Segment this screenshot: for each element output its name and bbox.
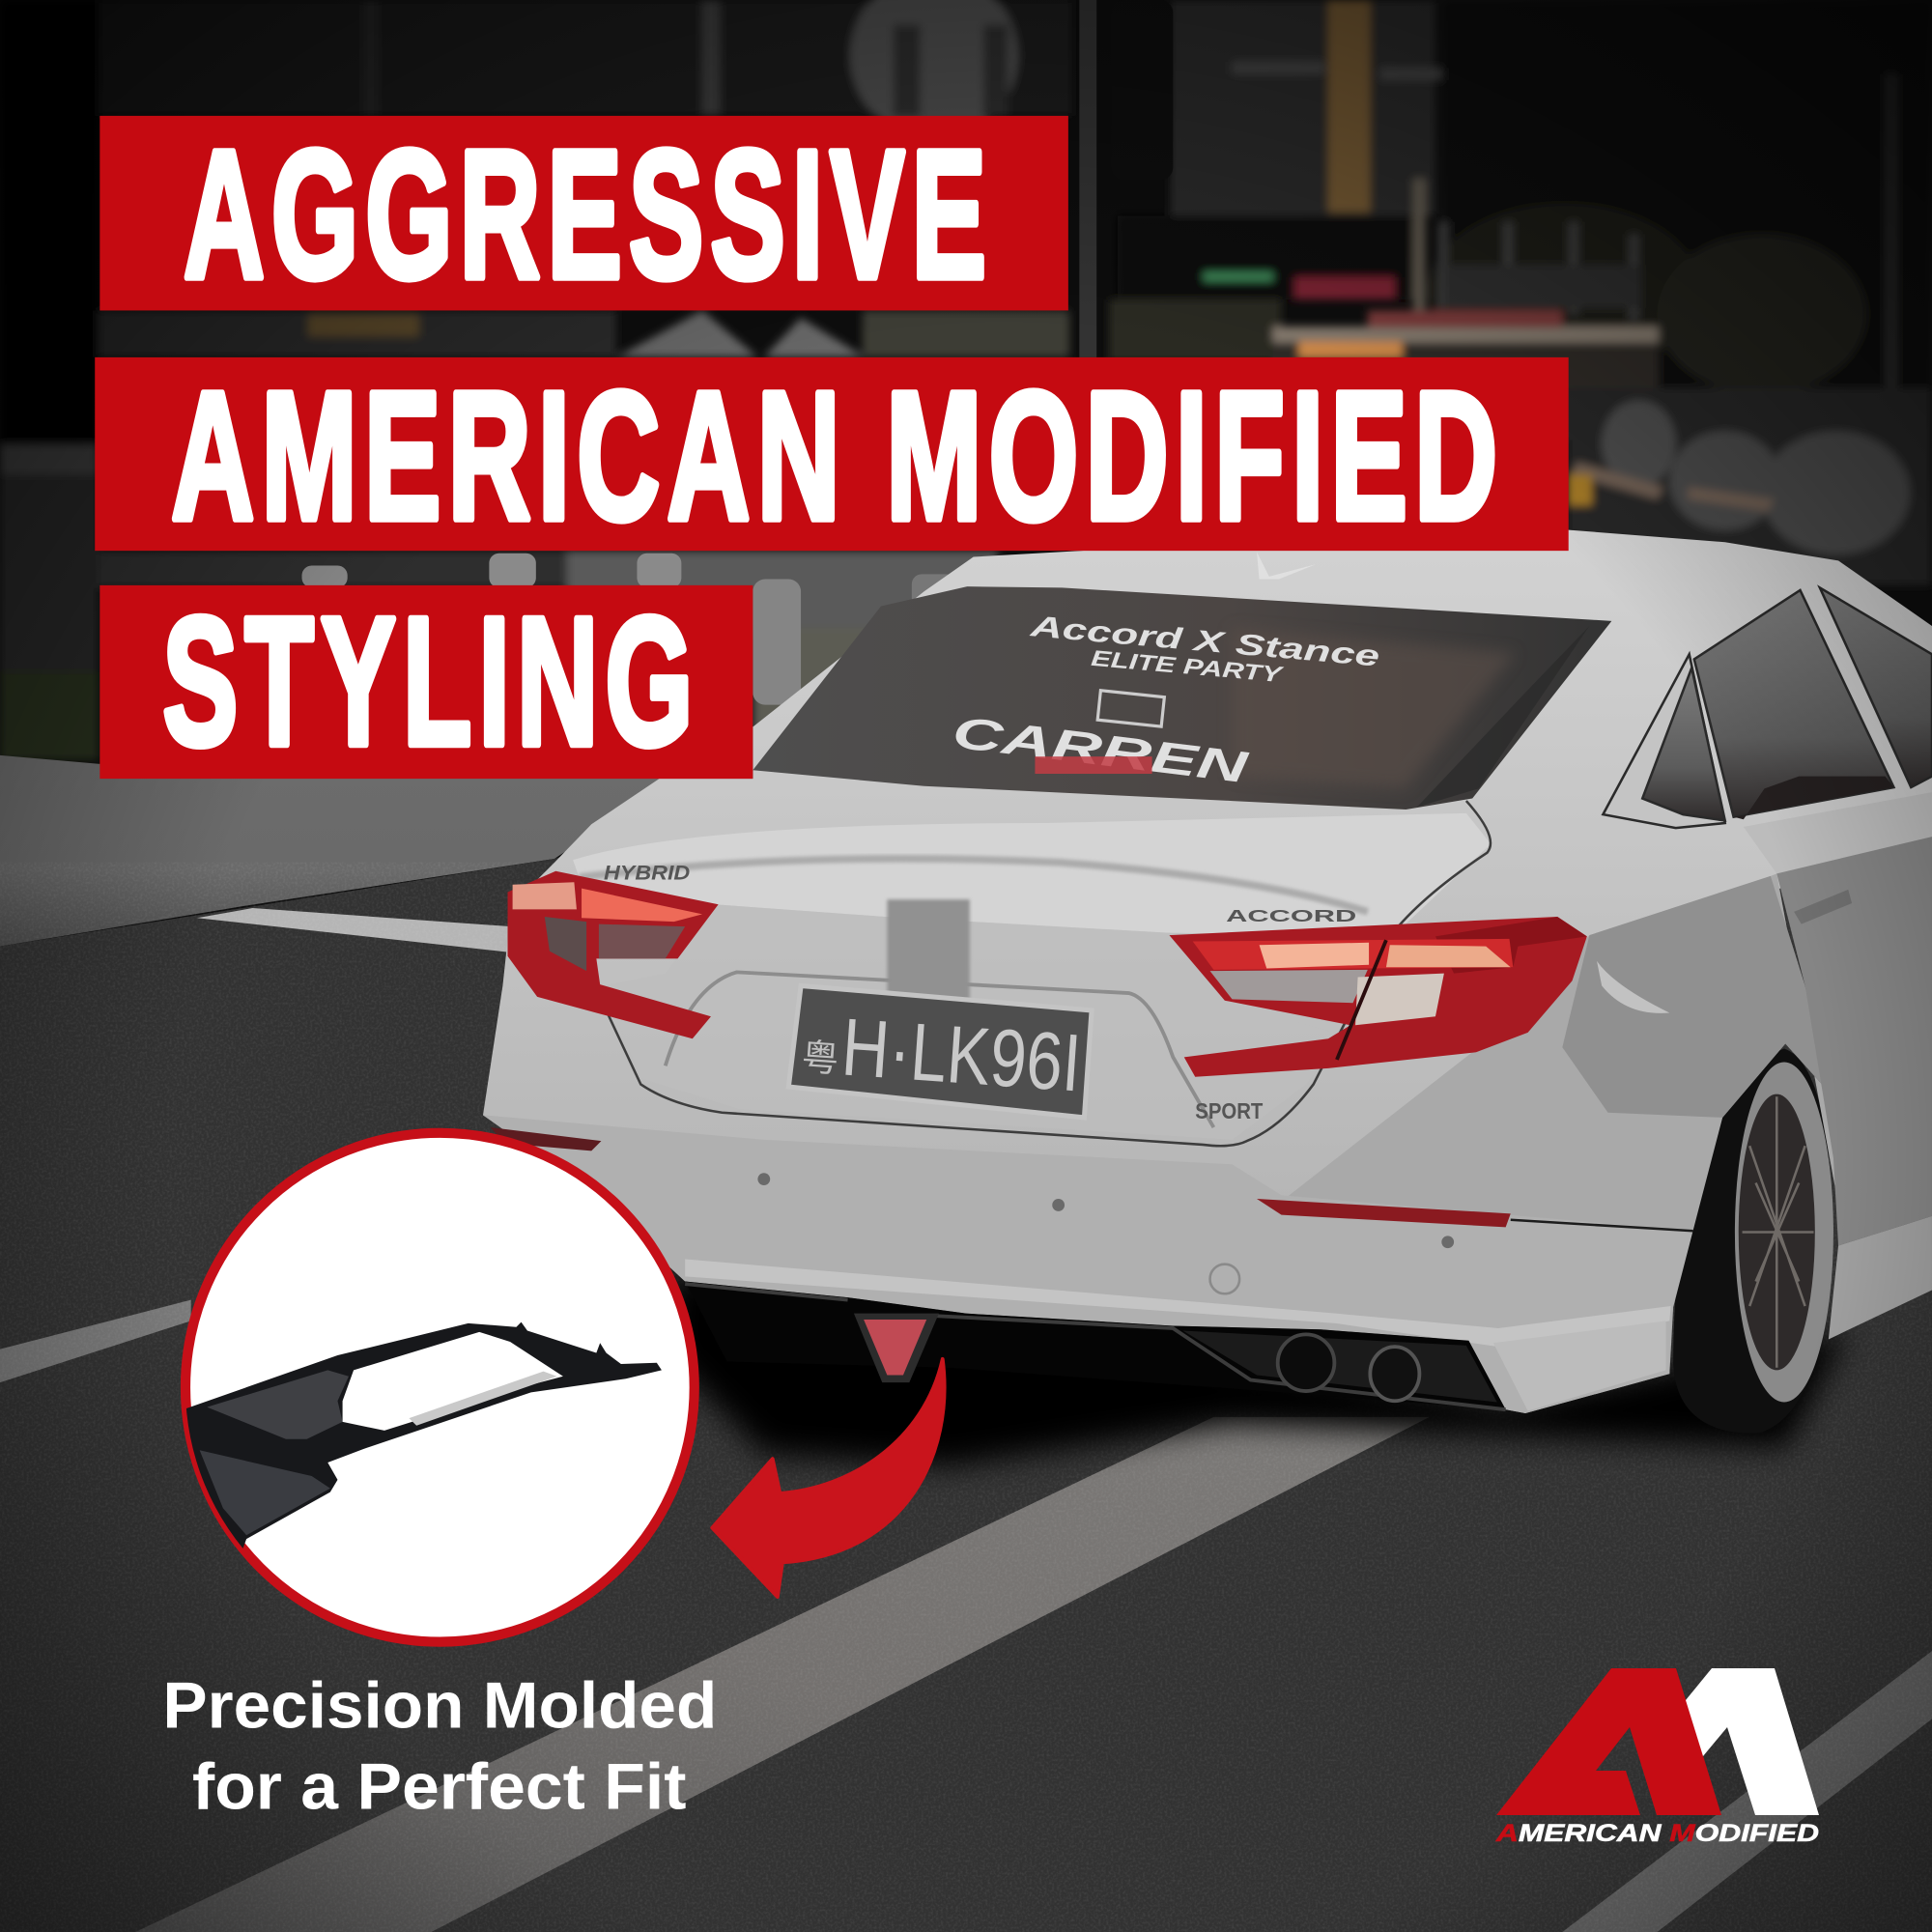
rear fender (1282, 873, 1835, 1231)
roof fin (1257, 552, 1316, 579)
asphalt grain (0, 863, 1932, 1932)
trunk lid seam (596, 801, 1491, 1146)
arrow pointing to product (712, 1359, 945, 1597)
headline bar: AGGRESSIVE (99, 113, 1068, 317)
caption (162, 1669, 717, 1823)
headline bar: STYLING: STYLING (162, 580, 699, 783)
diffuser (685, 1282, 1506, 1409)
bollards (301, 554, 956, 705)
trunk badges: HYBRID (604, 861, 691, 885)
window sticker text: Accord X Stance (1028, 610, 1381, 673)
spoiler lip and trunk lid (573, 813, 1491, 936)
license plate: 粤 (800, 1037, 840, 1081)
rear window: CARREN (950, 706, 1251, 792)
taillight right (1169, 917, 1587, 1077)
window sticker text (1028, 610, 1381, 687)
road markings (0, 908, 1932, 1932)
rear window (753, 586, 1611, 810)
trunk badge: blurred logo (887, 899, 970, 1008)
caption: for a Perfect Fit (192, 1750, 686, 1823)
headline bar: STYLING (99, 580, 753, 783)
diffuser brake light (854, 1314, 939, 1382)
bumper reflector left (491, 1127, 601, 1151)
lower bumper (483, 1115, 1693, 1413)
window sticker text: ELITE PARTY (1090, 645, 1286, 687)
car (483, 529, 1932, 1434)
license plate: H·LK96I (839, 1001, 1084, 1108)
wheel (1673, 1048, 1833, 1434)
taillight left (508, 871, 719, 1038)
logo: American Modified (1495, 1668, 1819, 1847)
headline bar: AGGRESSIVE: AGGRESSIVE (184, 113, 993, 317)
logo: American Modified: AMERICAN MODIFIED (1495, 1820, 1819, 1847)
license plate (788, 985, 1092, 1118)
trunk badges: ACCORD (1226, 906, 1357, 925)
trunk badges (604, 861, 1357, 1123)
background: blurred city scenery (0, 0, 1932, 777)
caption: Precision Molded (162, 1669, 717, 1742)
trunk badges: SPORT (1195, 1098, 1263, 1123)
bumper reflector right (1257, 1199, 1511, 1227)
door panel (1744, 792, 1932, 1339)
shadow under car (666, 1269, 1848, 1466)
callout circle with product (148, 1133, 695, 1642)
car body (483, 529, 1932, 1413)
sidewalk curb (0, 755, 764, 947)
product: rear diffuser (185, 1321, 662, 1548)
side windows (1603, 587, 1932, 828)
parking sensors (757, 1173, 1454, 1293)
road surface (0, 788, 1932, 1932)
